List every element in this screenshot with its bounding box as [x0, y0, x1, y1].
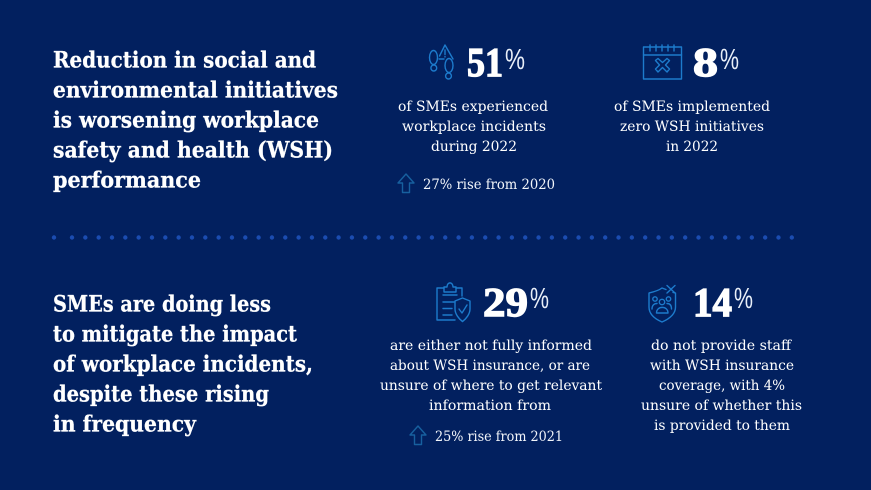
icon: calendar with cross [644, 45, 682, 79]
dotted divider [54, 235, 794, 240]
description: unsure of whether this [641, 398, 802, 414]
description [380, 338, 602, 414]
description [641, 338, 802, 434]
description: do not provide staff [651, 338, 792, 354]
percent sign: % [734, 283, 753, 315]
description: of SMEs experienced [398, 99, 548, 115]
description: of SMEs implemented [614, 99, 770, 115]
icon: footprints with warning triangle [430, 45, 453, 79]
stat: 8% implemented zero initiatives [614, 39, 770, 155]
heading: reduction in initiatives [53, 48, 338, 194]
stat: 14% no insurance coverage [641, 279, 802, 434]
icon: clipboard with shield [437, 283, 470, 322]
description: coverage, with 4% [659, 378, 785, 394]
heading: reduction in initiatives: Reduction in social and [53, 48, 316, 74]
description: with WSH insurance [650, 358, 794, 374]
description: is provided to them [654, 418, 791, 434]
value: 8 [693, 39, 718, 85]
value: 29 [483, 279, 528, 325]
arrow: up [398, 174, 414, 192]
description: zero WSH initiatives [620, 119, 764, 135]
stat: 51% of SMEs experienced incidents [398, 39, 555, 193]
percent sign: % [530, 283, 549, 315]
trend note: 27% rise from 2020 [423, 177, 555, 193]
heading: SMEs doing less: despite these rising [53, 382, 269, 408]
icon: shield with people and cross [649, 286, 676, 322]
description: are either not fully informed [390, 338, 592, 354]
arrow: up [410, 426, 426, 444]
stat: 29% not fully informed [380, 279, 602, 445]
heading: SMEs doing less: of workplace incidents, [53, 352, 313, 378]
heading: SMEs doing less: SMEs are doing less [53, 292, 271, 318]
value: 51 [467, 39, 503, 85]
heading: SMEs doing less: to mitigate the impact [53, 322, 298, 348]
value: 14 [693, 279, 732, 325]
heading: reduction in initiatives: environmental initiatives [53, 78, 338, 104]
heading: reduction in initiatives: performance [53, 168, 201, 194]
trend note: 25% rise from 2021 [435, 429, 563, 445]
heading: reduction in initiatives: is worsening workplace [53, 108, 319, 134]
description [614, 99, 770, 155]
description [398, 99, 548, 155]
description: information from [429, 398, 552, 414]
description: in 2022 [666, 139, 718, 155]
description: workplace incidents [402, 119, 546, 135]
description: during 2022 [431, 139, 517, 155]
percent sign: % [505, 44, 525, 76]
description: about WSH insurance, or are [390, 358, 590, 374]
heading: SMEs doing less: in frequency [53, 412, 197, 438]
heading: reduction in initiatives: safety and health (WSH) [53, 138, 333, 164]
description: unsure of where to get relevant [380, 378, 602, 394]
heading: SMEs doing less [53, 292, 313, 438]
percent sign: % [720, 44, 739, 76]
